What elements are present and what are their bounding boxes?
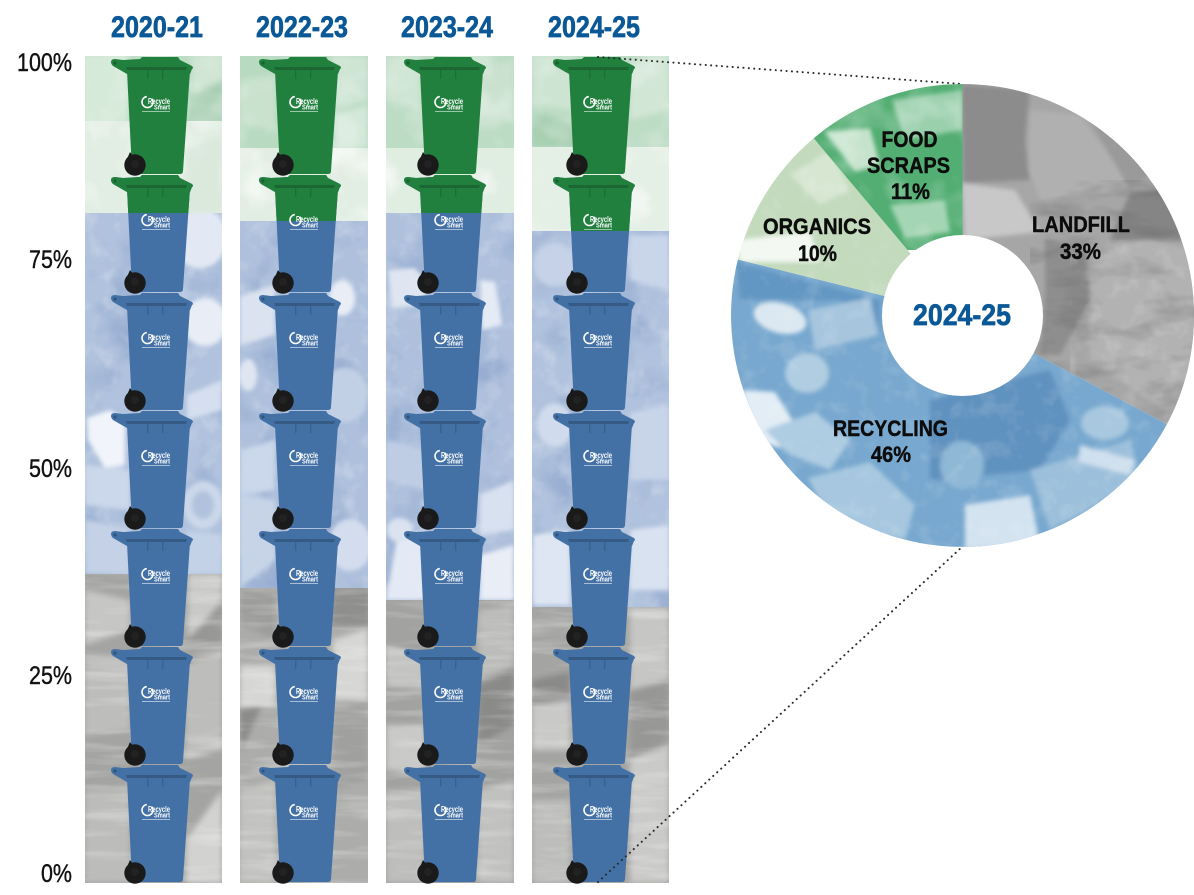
band: food scraps bbox=[386, 56, 514, 148]
year heading: 2023-24: 2023-24 bbox=[401, 11, 493, 44]
axis labels: percentage scale: 50% bbox=[29, 455, 72, 483]
donut chart: 2024-25 breakdown bbox=[725, 80, 1194, 550]
bins: green portion bbox=[259, 57, 341, 221]
bins: stack of seven wheelie bins bbox=[111, 175, 193, 884]
axis labels: percentage scale: 25% bbox=[29, 662, 72, 690]
label: recycling bbox=[833, 416, 948, 467]
panel: 2023-24 stacked column bbox=[386, 56, 514, 884]
label: recycling: 46% bbox=[871, 442, 911, 467]
centre label: 2024-25 bbox=[913, 299, 1011, 332]
label: organics bbox=[763, 214, 871, 266]
band: food scraps bbox=[240, 56, 368, 148]
label: organics: ORGANICS bbox=[763, 214, 871, 239]
band: food scraps bbox=[532, 56, 669, 147]
axis labels: percentage scale bbox=[17, 49, 72, 888]
year heading: 2024-25: 2024-25 bbox=[548, 11, 640, 44]
band: organics bbox=[85, 121, 222, 213]
band: recycling bbox=[239, 221, 372, 588]
bins: stack of seven wheelie bins bbox=[553, 175, 635, 884]
label: landfill bbox=[1032, 212, 1130, 264]
band: organics bbox=[240, 148, 368, 221]
label: food scraps: SCRAPS bbox=[867, 153, 950, 178]
segment: recycling 46% bbox=[725, 255, 1170, 550]
connector: dotted lines from 2024-25 column to donut bbox=[598, 57, 962, 882]
band: recycling bbox=[85, 208, 227, 574]
bins: green portion bbox=[404, 57, 486, 213]
band: landfill bbox=[532, 607, 669, 883]
panel: 2024-25 stacked column bbox=[532, 56, 669, 884]
band: organics bbox=[386, 148, 514, 213]
axis labels: percentage scale: 100% bbox=[17, 49, 72, 77]
axis labels: percentage scale: 0% bbox=[41, 860, 72, 888]
band: landfill bbox=[386, 600, 514, 883]
bins: stack of seven wheelie bins bbox=[404, 175, 486, 884]
label: food scraps bbox=[867, 127, 950, 204]
band: recycling bbox=[386, 213, 514, 600]
label: landfill: LANDFILL bbox=[1032, 212, 1130, 237]
segment: organics 10% bbox=[738, 138, 911, 296]
label: recycling: RECYCLING bbox=[833, 416, 948, 441]
label: organics: 10% bbox=[798, 241, 837, 266]
segment: food scraps 11% bbox=[805, 80, 965, 250]
panel: 2020-21 stacked column bbox=[83, 54, 227, 884]
bins: green portion bbox=[553, 57, 635, 231]
segment: landfill 33% bbox=[960, 80, 1194, 430]
label: food scraps: 11% bbox=[891, 179, 930, 204]
panel: 2022-23 stacked column bbox=[239, 56, 372, 884]
year heading: 2020-21: 2020-21 bbox=[111, 11, 203, 44]
band: organics bbox=[532, 147, 669, 231]
year heading: 2022-23: 2022-23 bbox=[256, 11, 348, 44]
bins: stack of seven wheelie bins bbox=[259, 175, 341, 884]
axis labels: percentage scale: 75% bbox=[29, 246, 72, 274]
band: recycling bbox=[532, 231, 669, 607]
band: landfill bbox=[85, 574, 222, 883]
label: food scraps: FOOD bbox=[882, 127, 938, 152]
band: landfill bbox=[240, 586, 370, 883]
bins: green portion bbox=[111, 57, 193, 213]
donut hole bbox=[882, 235, 1043, 396]
label: landfill: 33% bbox=[1060, 239, 1101, 264]
band: food scraps bbox=[83, 54, 224, 124]
